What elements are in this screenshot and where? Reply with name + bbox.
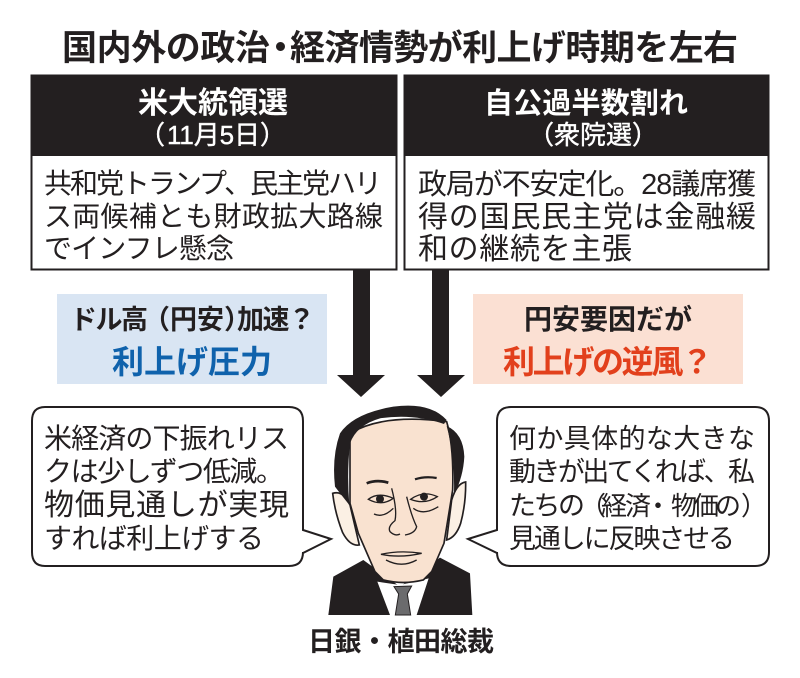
title [62,29,738,68]
callout: rate hike pressure [57,294,327,384]
callout: rate hike pressure: （円安） [143,305,251,335]
body text: lower house election [418,168,756,266]
speech bubble: right: 経済 [601,491,651,521]
callout: rate hike headwind: 円安要因だが [524,303,692,335]
heading date: US election [139,120,286,150]
speech bubble: right: 動きが出てくれば、私 [509,457,755,487]
panel header: US election [31,75,397,156]
panel: lower house election [404,75,769,270]
arrow: left [337,268,385,397]
panel: US election [31,75,397,270]
speech bubble: left: 米経済の下振れリス [44,423,289,454]
ears [333,493,359,545]
callout: rate hike headwind: 利上げの逆風？ [503,344,713,380]
speech bubble: right: たちの [509,491,585,521]
suit [328,558,472,615]
body text: US election [44,168,383,264]
heading: US election: 米大統領選 [138,87,288,120]
tie [394,586,412,615]
speech bubble: right: 物価の [671,491,741,521]
speech bubble: left: クは少しずつ低減。 [44,456,284,487]
panel header: lower house election [404,75,769,156]
callout: rate hike pressure: 利上げ圧力 [112,344,272,380]
pupils [376,495,384,503]
shirt [377,578,429,615]
body text: US election: でインフレ懸念 [44,233,234,264]
heading date: US election: 11月5日 [167,120,260,150]
speech bubble: left: すれば利上げする [44,523,264,554]
speech bubble: right: ・ [645,491,671,521]
speech bubble: right: （ [580,491,606,521]
heading date: US election: （ [139,120,165,150]
speech bubble: right: 何か具体的な大きな [509,424,755,454]
title: 経済情勢が利上げ時期を左右 [290,29,738,68]
callout: rate hike headwind [473,294,743,384]
hair [334,406,447,505]
caption: BOJ Governor Ueda: 日銀・植田総裁 [308,627,494,657]
body text: lower house election: 得の国民民主党は金融緩 [418,201,756,234]
speech bubble: right: 見通しに反映させる [509,524,735,554]
title: ・ [263,29,298,68]
title: 国内外の政治 [62,29,270,68]
heading sub: lower house election: （衆院選） [528,120,658,150]
callout: rate hike pressure: 加速？ [237,305,315,335]
face [350,419,453,582]
callout: rate hike pressure: ドル高 [70,305,148,335]
heading date: US election: ） [260,120,286,150]
arrow: right [417,268,465,397]
heading: lower house election: 自公過半数割れ [484,87,688,120]
speech bubble: right: ） [741,491,767,521]
speech bubble: right [468,407,769,566]
body text: lower house election: 政局が不安定化。28議席獲 [418,168,756,201]
speech bubble: left [32,407,331,566]
body text: lower house election: 和の継続を主張 [418,233,632,266]
facial features [367,477,438,564]
body text: US election: ス両候補とも財政拡大路線 [44,201,383,232]
body text: US election: 共和党トランプ、民主党ハリ [44,168,382,199]
illustration: Governor Ueda [328,406,472,615]
speech bubble: left: 物価見通しが実現 [44,489,289,522]
